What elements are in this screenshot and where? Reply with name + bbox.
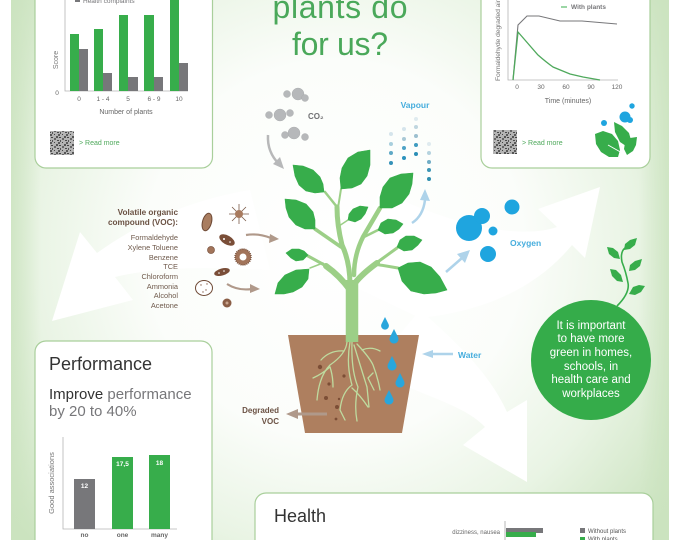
vapour label: Vapour (401, 100, 430, 110)
read more link: > Read more (79, 140, 120, 147)
VOC text block: Acetone (151, 301, 178, 310)
CO2 clouds (266, 88, 308, 140)
callout: green circle: workplaces (561, 388, 620, 400)
oxygen label: Oxygen (510, 238, 541, 248)
bar chart: good associations: 12 (81, 483, 88, 490)
subheading: improve performance: Improve performance (49, 386, 192, 403)
QR code (50, 131, 74, 155)
line chart: formaldehyde degraded: Formaldehyde degraded air (495, 0, 502, 81)
callout: green circle: health care and (551, 374, 631, 386)
bar chart: good associations: 18 (156, 460, 163, 467)
legend: without plants: Without plants (588, 529, 626, 535)
soil particles (318, 365, 346, 420)
plant stem and branches (308, 189, 398, 342)
VOC text block: Benzene (149, 253, 178, 262)
callout: green circle: green in homes, (550, 347, 632, 359)
bar chart: good associations: Good associations (47, 452, 56, 514)
line chart: formaldehyde degraded: 0 (515, 84, 519, 91)
title: for us? (292, 26, 388, 62)
bar chart: score by number of plants: 5 (126, 96, 130, 103)
read more link: > Read more (522, 140, 563, 147)
panel: plants and score chart (35, 0, 212, 168)
VOC text block: Chloroform (141, 272, 178, 281)
VOC text block: Volatile organic (118, 208, 178, 217)
bar chart: score by number of plants (53, 0, 188, 116)
subheading: improve performance (49, 386, 192, 420)
VOC text block: Ammonia (147, 282, 179, 291)
heading: performance: Performance (49, 354, 152, 374)
subheading: improve performance: by 20 to 40% (49, 403, 137, 420)
bar chart: score by number of plants: 0 (55, 90, 59, 97)
bar chart: symptoms: dizziness, nausea (452, 530, 501, 536)
vapour droplets (389, 117, 431, 181)
bar chart: good associations: many (151, 532, 168, 539)
icon: leaves with bubbles (595, 103, 637, 157)
line chart: formaldehyde degraded (495, 0, 623, 105)
VOC text block: Formaldehyde (131, 233, 178, 242)
bar chart: score by number of plants: 6 - 9 (147, 96, 161, 103)
arrow: CO2 to plant (268, 135, 284, 169)
panel: formaldehyde chart (481, 0, 650, 168)
degraded VOC label (242, 406, 279, 426)
callout: green circle: schools, in (564, 361, 618, 373)
bar chart: good associations: one (117, 532, 129, 539)
line chart: formaldehyde degraded: 60 (562, 84, 570, 91)
VOC text block: Xylene Toluene (128, 243, 178, 252)
bar chart: symptoms (452, 521, 543, 540)
bar chart: score by number of plants: 0 (77, 96, 81, 103)
panel: health (255, 493, 653, 540)
line chart: formaldehyde degraded: 90 (587, 84, 595, 91)
legend: without plants (580, 528, 626, 540)
legend: with plants: With plants (571, 4, 606, 11)
bar chart: good associations: no (81, 532, 88, 539)
VOC text block (108, 208, 179, 310)
line chart: formaldehyde degraded: 120 (612, 84, 623, 91)
oxygen bubbles (456, 200, 520, 262)
callout: green circle (531, 300, 651, 420)
plant pot (288, 335, 419, 433)
callout: green circle: It is important (556, 320, 626, 332)
arrow: vapour (412, 189, 430, 223)
bar chart: score by number of plants: 10 (175, 96, 183, 103)
water label: Water (458, 350, 482, 360)
panel: performance (35, 341, 212, 540)
bar chart: score by number of plants: Number of plants (99, 109, 153, 116)
title (272, 0, 408, 62)
VOC text block: Alcohol (154, 291, 178, 300)
arrow: oxygen (446, 250, 470, 272)
VOC text block: compound (VOC): (108, 218, 178, 227)
water drops (381, 317, 405, 405)
degraded VOC label: Degraded (242, 406, 279, 415)
CO2 label: CO₂ (308, 112, 324, 121)
plant leaves (275, 150, 447, 294)
callout: green circle: to have more (557, 333, 625, 345)
VOC text block: TCE (163, 262, 178, 271)
line chart: formaldehyde degraded: Time (minutes) (545, 98, 591, 105)
bar chart: good associations (47, 437, 177, 539)
roots (313, 342, 380, 421)
bar chart: score by number of plants: Score (53, 51, 60, 69)
VOC particles (196, 204, 251, 308)
heading: health: Health (274, 506, 326, 526)
arrows: VOC to plant (227, 234, 279, 293)
line chart: formaldehyde degraded: 30 (537, 84, 545, 91)
QR code (493, 130, 517, 154)
degraded VOC label: VOC (262, 417, 279, 426)
bar chart: good associations: 17,5 (116, 461, 129, 468)
bar chart: score by number of plants: 1 - 4 (96, 96, 110, 103)
arrow: water (422, 350, 453, 358)
sprout (607, 238, 645, 306)
arrow: degraded VOC (286, 409, 327, 419)
background arrows (52, 187, 600, 482)
